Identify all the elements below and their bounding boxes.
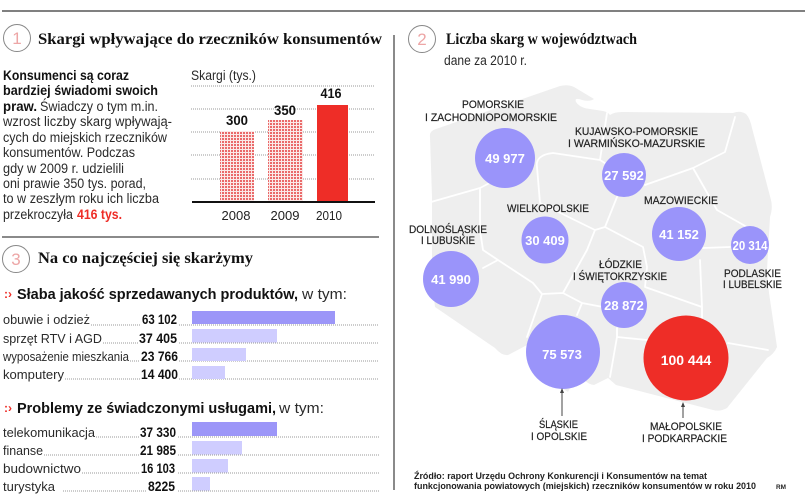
region labels: PODLASKIE: [724, 268, 781, 280]
bar list: products: sprzęt RTV i AGD: [3, 331, 102, 346]
bar list: products: wyposażenie mieszkania: [2, 349, 130, 364]
map of Poland: [430, 85, 777, 411]
bubble: podlaskie: 20 314: [732, 238, 768, 253]
panel 1: complaints to consumer ombudsmen: [2, 24, 382, 223]
intro text block: gdy w 2009 r. udzielili: [3, 161, 124, 176]
intro text block: Konsumenci są coraz: [3, 68, 129, 83]
bubble: łódzkie: [601, 282, 647, 328]
number badge 2: 2: [417, 30, 427, 49]
region labels: I WARMIŃSKO-MAZURSKIE: [568, 137, 705, 150]
region labels: I OPOLSKIE: [531, 431, 587, 443]
heading 3: Na co najczęściej się skarżymy: [38, 250, 253, 267]
region labels: [409, 99, 782, 445]
source note: funkcjonowania powiatowych (miejskich) rzeczników konsumentów w roku 2010: [414, 481, 756, 492]
bubble: pomorskie: [475, 128, 535, 188]
intro text block: wzrost liczby skarg wpływają-: [2, 114, 172, 129]
source note: [414, 471, 756, 492]
panel 2: complaints by voivodeship: [408, 26, 786, 492]
bar list: products: 37 405: [139, 331, 177, 346]
bubble: śląskie: 75 573: [542, 347, 582, 362]
bar list: products: 14 400: [141, 367, 178, 382]
bubble: dolnośląskie: [423, 251, 479, 307]
source note: Źródło: raport Urzędu Ochrony Konkurencji i Konsumentów na temat: [414, 471, 708, 482]
region labels: POMORSKIE: [462, 99, 524, 111]
bar list: services: 21 985: [140, 443, 176, 458]
number badge 3: [2, 246, 30, 272]
bubble: pomorskie: 49 977: [485, 151, 525, 166]
bar 2010: 416: [320, 86, 342, 101]
subheading: services: Problemy ze świadczonymi usługami,: [17, 400, 276, 417]
bar list: services: telekomunikacja: [3, 425, 96, 440]
year labels: 2009: [270, 209, 300, 223]
region labels: I ŚWIĘTOKRZYSKIE: [573, 270, 667, 283]
bar list: services: finanse: [3, 443, 43, 458]
region labels: MAŁOPOLSKIE: [650, 421, 722, 433]
arrow: małopolskie: [681, 402, 685, 418]
intro text block: to w zeszłym roku ich liczba: [3, 191, 159, 206]
region labels: DOLNOŚLĄSKIE: [409, 223, 487, 236]
bubble: kujawsko-pomorskie: 27 592: [604, 168, 644, 183]
region labels: ŁÓDZKIE: [599, 258, 642, 271]
bar list: products: 63 102: [142, 312, 177, 327]
region labels: I LUBELSKIE: [723, 279, 782, 291]
bar chart: complaints per year: Skargi (tys.): [191, 68, 256, 83]
bar list: products: komputery: [3, 367, 64, 382]
number badge 2: [408, 26, 436, 52]
year labels: 2008: [222, 209, 251, 223]
region labels: I PODKARPACKIE: [642, 433, 727, 445]
bar list: services: 37 330: [140, 425, 176, 440]
bar list: products: [2, 311, 379, 382]
bubble: mazowieckie: [652, 207, 706, 261]
number badge 1: [4, 24, 30, 52]
number badge 1: 1: [12, 29, 22, 48]
intro text block: konsumentów. Podczas: [3, 145, 135, 160]
intro text block: 416 tys.: [77, 207, 122, 222]
bar list: services: [3, 422, 379, 494]
region labels: I LUBUSKIE: [421, 235, 475, 247]
bar list: products: obuwie i odzież: [3, 312, 90, 327]
bar 2008: 300: [226, 113, 248, 128]
bar 2010: [317, 86, 348, 202]
bar list: services: 16 103: [141, 461, 175, 476]
bubble: mazowieckie: 41 152: [659, 227, 699, 242]
bubble: wielkopolskie: [522, 216, 568, 264]
intro text block: Świadczy o tym m.in.: [40, 99, 158, 114]
bubble: podlaskie: [731, 226, 769, 264]
subheading: services: :›: [4, 401, 12, 415]
year labels: 2010: [316, 209, 342, 223]
number badge 3: 3: [11, 250, 21, 269]
bar list: services: 8225: [148, 479, 175, 494]
heading 1: Skargi wpływające do rzeczników konsumentów: [38, 31, 382, 48]
bar 2009: 350: [274, 103, 296, 118]
bar chart: complaints per year: [191, 68, 375, 223]
intro text block: cych do miejskich rzeczników: [3, 130, 167, 145]
bar list: services: turystyka: [3, 479, 56, 494]
subheading: product quality: Słaba jakość sprzedawanych produktów,: [17, 286, 298, 303]
intro text block: [2, 68, 172, 222]
intro text block: oni prawie 350 tys. porad,: [3, 176, 146, 191]
region labels: WIELKOPOLSKIE: [507, 203, 589, 215]
region labels: ŚLĄSKIE: [539, 418, 578, 431]
intro text block: bardziej świadomi swoich: [3, 83, 158, 98]
bar 2009: [268, 103, 303, 202]
subtitle: dane za 2010 r.: [444, 53, 527, 68]
region labels: KUJAWSKO-POMORSKIE: [575, 126, 698, 138]
panel 3: what we complain about: [2, 246, 379, 494]
subheading: services: w tym:: [278, 400, 324, 417]
bubble: wielkopolskie: 30 409: [525, 233, 565, 248]
bubble: kujawsko-pomorskie: [602, 153, 646, 197]
bar 2008: [220, 113, 254, 202]
region borders: [431, 113, 768, 377]
bubble: małopolskie: [644, 316, 728, 400]
subheading: product quality: w tym:: [301, 286, 347, 303]
bubble: dolnośląskie: 41 990: [431, 272, 471, 287]
region labels: I ZACHODNIOPOMORSKIE: [425, 112, 557, 124]
bar list: services: budownictwo: [3, 461, 81, 476]
subheading: product quality: :›: [4, 287, 12, 301]
author initials: RM: [776, 484, 786, 491]
bubble: śląskie: [526, 315, 600, 389]
bubble: łódzkie: 28 872: [604, 298, 644, 313]
arrow: śląskie: [560, 388, 564, 416]
bubble: małopolskie: 100 444: [661, 352, 712, 368]
heading 2: Liczba skarg w województwach: [446, 31, 637, 48]
bar list: products: 23 766: [141, 349, 178, 364]
region labels: MAZOWIECKIE: [644, 195, 718, 207]
intro text block: praw.: [3, 99, 37, 114]
year labels: [222, 209, 342, 223]
intro text block: przekroczyła: [3, 207, 73, 222]
